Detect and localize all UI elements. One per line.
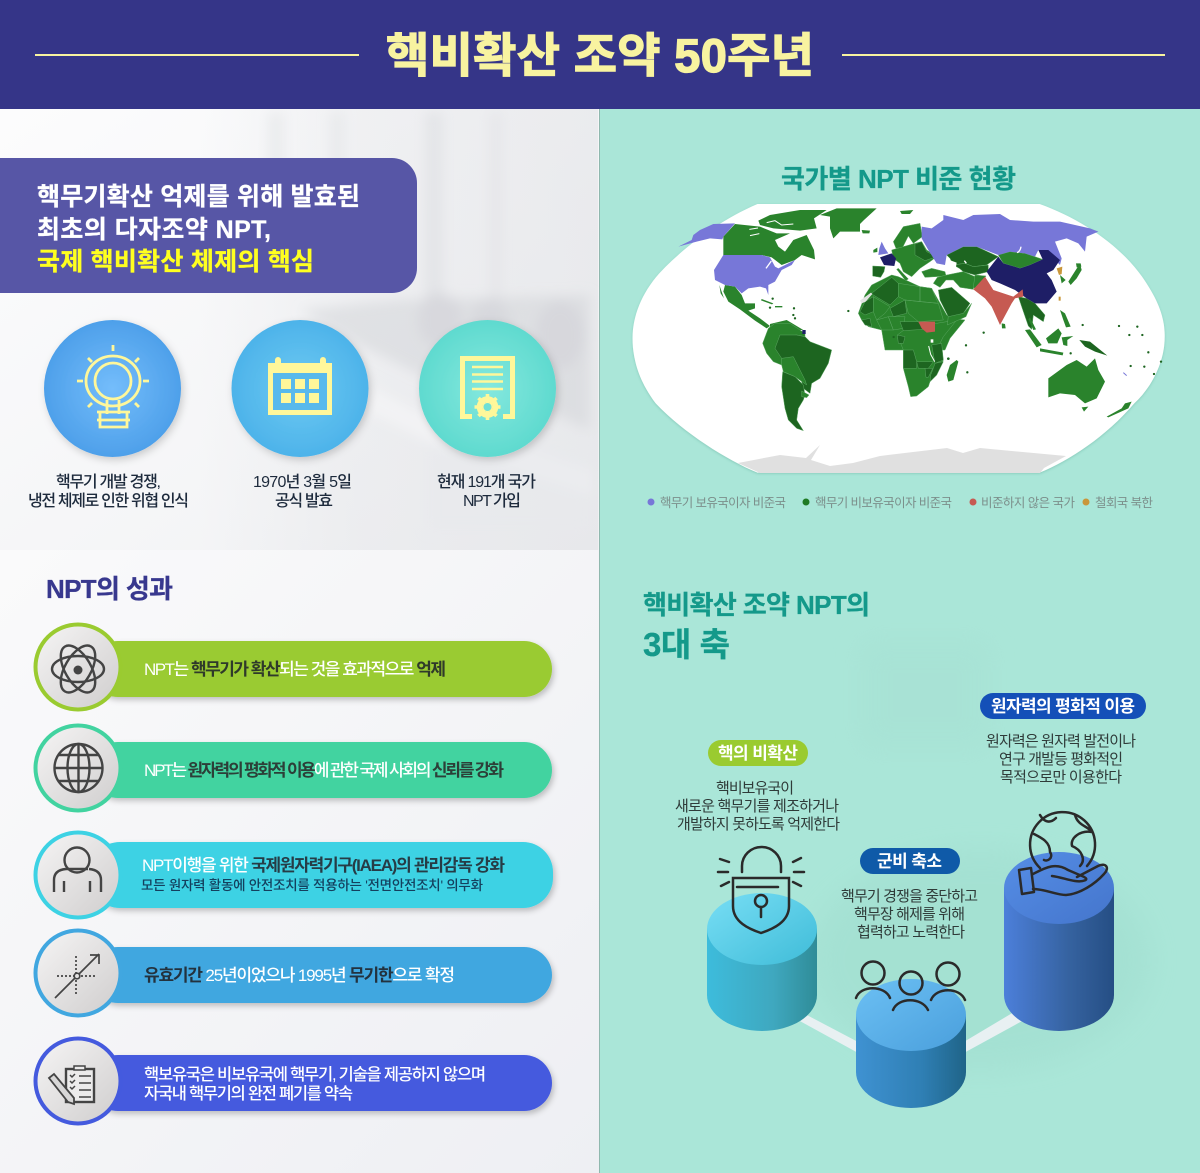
- icon: calendar circle: [232, 320, 368, 457]
- text: non-proliferation description: 새로운 핵무기를 제조하거나: [675, 798, 839, 815]
- North America: [678, 208, 860, 330]
- header bar: [0, 0, 1200, 109]
- row 4: term extension: 유효기간 25년이었으나 1995년 무기한으로 확정: [144, 966, 455, 985]
- text: date caption: [253, 473, 352, 510]
- callout: NPT definition banner: [0, 158, 417, 293]
- row 5: disarmament pledge: [36, 1038, 552, 1124]
- text: cause caption: 핵무기 개발 경쟁,: [56, 473, 161, 491]
- icon: globe in hand: [1019, 812, 1107, 895]
- label: disarmament: [860, 848, 960, 874]
- text: non-proliferation description: [675, 780, 840, 833]
- title: 핵비확산 조약 50주년: [386, 29, 814, 82]
- row 1: non-proliferation effect: [36, 624, 552, 710]
- row 3: IAEA supervision: [36, 832, 553, 918]
- panel: achievements background: [0, 550, 600, 1173]
- row 4: term extension: [36, 930, 552, 1016]
- text: date caption: 공식 발효: [275, 492, 333, 510]
- legend: 철회국 북한: [1095, 496, 1153, 510]
- text: peaceful use description: 연구 개발등 평화적인: [999, 751, 1123, 768]
- heading: three pillars: 핵비확산 조약 NPT의: [643, 590, 870, 620]
- text: cause caption: 냉전 체제로 인한 위협 인식: [28, 492, 189, 510]
- callout: NPT definition banner: 핵무기확산 억제를 위해 발효된: [37, 183, 360, 211]
- icon: chart arrow: [36, 930, 120, 1016]
- row 1: non-proliferation effect: NPT는 핵무기가 확산되는 것을 효과적으로 억제: [144, 660, 446, 679]
- text: disarmament description: 핵무기 경쟁을 중단하고: [841, 888, 978, 905]
- connectors between pillars: [798, 1012, 1024, 1054]
- row 5: disarmament pledge: 핵보유국은 비보유국에 핵무기, 기술을 제공하지 않으며: [144, 1065, 486, 1084]
- pillar: peaceful use cylinder: [1004, 812, 1114, 1031]
- pillar: disarmament cylinder: [856, 962, 966, 1108]
- icon: people: [856, 962, 965, 1010]
- Africa north: [858, 275, 965, 350]
- text: date caption: 1970년 3월 5일: [253, 473, 352, 491]
- label: peaceful use: [980, 693, 1146, 719]
- legend: 핵무기 보유국이자 비준국: [660, 495, 786, 510]
- heading: three pillars: [643, 590, 870, 663]
- text: cause caption: [28, 473, 189, 510]
- heading: achievements: NPT의 성과: [46, 574, 173, 604]
- icon: lock: [718, 847, 804, 933]
- callout: NPT definition banner: 국제 핵비확산 체제의 핵심: [37, 248, 314, 276]
- text: members caption: NPT 가입: [463, 492, 521, 510]
- text: peaceful use description: [986, 733, 1136, 786]
- legend: 핵무기 비보유국이자 비준국: [815, 495, 952, 510]
- row 3: IAEA supervision: NPT이행을 위한 국제원자력기구(IAEA)의 관리감독 강화: [142, 856, 505, 875]
- Eurasia: [860, 208, 1098, 329]
- label: peaceful use: 원자력의 평화적 이용: [991, 697, 1135, 716]
- Southeast Asia and Oceania: [982, 310, 1162, 417]
- heading: three pillars: 3대 축: [643, 626, 730, 663]
- row 3: IAEA supervision: 모든 원자력 활동에 안전조치를 적용하는 '전면안전조치' 의무화: [141, 878, 484, 893]
- text: members caption: 현재 191개 국가: [437, 473, 536, 491]
- panel: world map background: [600, 109, 1200, 550]
- text: non-proliferation description: 개발하지 못하도록 억제한다: [677, 816, 840, 833]
- panel: three pillars background: [599, 109, 1200, 1173]
- heading: map: 국가별 NPT 비준 현황: [781, 164, 1016, 194]
- icon: globe: [36, 726, 120, 810]
- row 5: disarmament pledge: 자국내 핵무기의 완전 폐기를 약속: [144, 1084, 353, 1103]
- icon: light bulb circle: [44, 320, 181, 457]
- panel: intro background: [0, 109, 600, 550]
- label: non-proliferation: [708, 740, 808, 766]
- icon: document circle: [419, 320, 556, 457]
- text: disarmament description: 협력하고 노력한다: [857, 924, 965, 941]
- text: disarmament description: 핵무장 해제를 위해: [854, 906, 965, 923]
- text: non-proliferation description: 핵비보유국이: [716, 780, 794, 797]
- callout: NPT definition banner: 최초의 다자조약 NPT,: [37, 216, 271, 244]
- label: disarmament: 군비 축소: [877, 852, 942, 871]
- icon: clipboard: [36, 1038, 120, 1124]
- text: disarmament description: [841, 888, 978, 941]
- legend: 비준하지 않은 국가: [981, 496, 1075, 510]
- icon: person: [36, 832, 120, 918]
- label: non-proliferation: 핵의 비확산: [718, 744, 798, 763]
- world map: [632, 204, 1165, 473]
- text: peaceful use description: 목적으로만 이용한다: [1000, 769, 1122, 786]
- pillar: non-proliferation cylinder: [707, 847, 817, 1031]
- text: peaceful use description: 원자력은 원자력 발전이나: [986, 733, 1136, 750]
- row 2: peaceful use trust: [36, 726, 552, 810]
- South America and southern Africa: [763, 320, 968, 431]
- row 2: peaceful use trust: NPT는 원자력의 평화적 이용에 관한 국제 사회의 신뢰를 강화: [144, 761, 504, 780]
- text: members caption: [437, 473, 536, 510]
- legend: [648, 495, 1153, 510]
- icon: atom: [36, 624, 120, 710]
